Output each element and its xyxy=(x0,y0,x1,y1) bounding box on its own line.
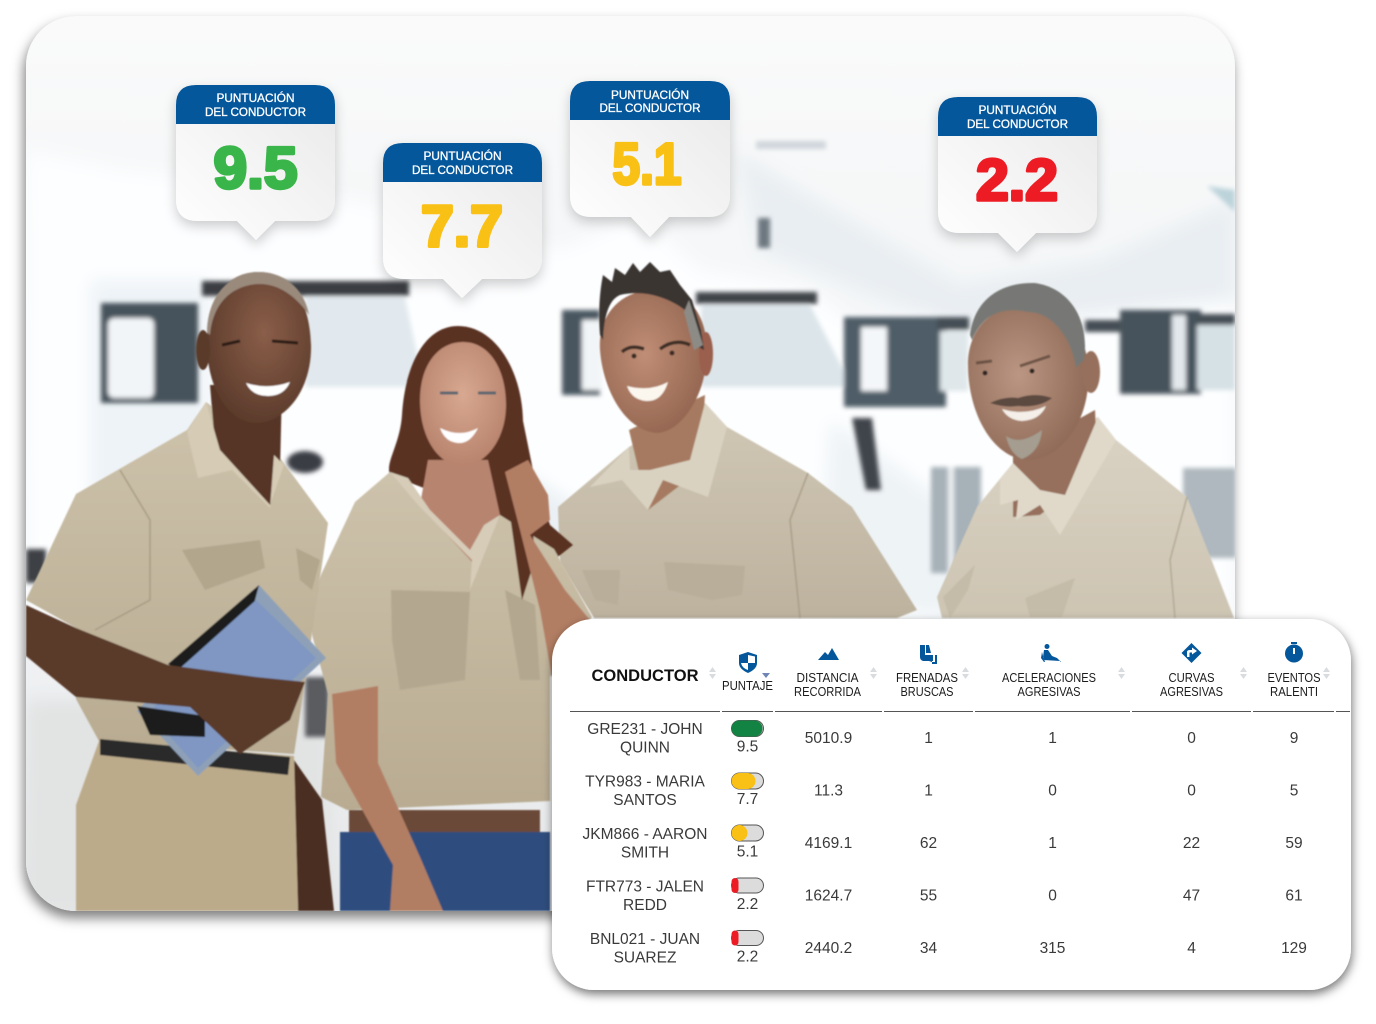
score bar 7.7 xyxy=(732,773,764,789)
row: GRE231: 5010.9 xyxy=(805,730,852,747)
person 2 xyxy=(305,326,592,911)
table header xyxy=(570,642,1350,712)
panel: driver score table xyxy=(552,619,1351,990)
heading: conductor: CONDUCTOR xyxy=(592,666,698,685)
heading: distancia recorrida: RECORRIDA xyxy=(794,684,861,699)
bubble: driver score 9.5: DEL CONDUCTOR xyxy=(205,105,306,119)
heading: curvas agresivas: CURVAS xyxy=(1168,670,1215,685)
photo background: blurred white trucks xyxy=(28,165,1232,842)
row: FTR773: FTR773 - JALEN xyxy=(586,878,704,896)
row: TYR983: SANTOS xyxy=(613,792,677,809)
heading: frenadas bruscas: FRENADAS xyxy=(896,670,958,685)
score bar 2.2 xyxy=(732,930,764,946)
bubble: driver score 5.1: 5.1 xyxy=(612,132,682,197)
row: FTR773: 2.2 xyxy=(737,896,758,913)
row: FTR773: REDD xyxy=(623,897,667,914)
row: BNL021: 2.2 xyxy=(737,948,758,966)
row: FTR773: 61 xyxy=(1285,888,1303,904)
heading: aceleraciones agresivas: AGRESIVAS xyxy=(1018,684,1081,699)
row: BNL021: 315 xyxy=(1040,940,1065,957)
bubble: driver score 5.1 xyxy=(570,81,730,237)
bubble: driver score 7.7: PUNTUACIÓN xyxy=(424,148,502,163)
sort arrows xyxy=(709,667,1330,679)
bubble: driver score 9.5: 9.5 xyxy=(214,136,298,201)
bubble: driver score 5.1: PUNTUACIÓN xyxy=(611,87,689,102)
row: TYR983: TYR983 - MARIA xyxy=(585,774,706,790)
row: JKM866: 1 xyxy=(1048,835,1057,852)
row: GRE231: 0 xyxy=(1187,730,1196,747)
row: JKM866: JKM866 - AARON xyxy=(583,826,707,843)
heading: puntaje: PUNTAJE xyxy=(722,678,773,693)
bubble: driver score 2.2: 2.2 xyxy=(976,148,1058,213)
icon: stopwatch xyxy=(1285,642,1303,662)
row: TYR983: 5 xyxy=(1290,782,1298,800)
bubble: driver score 7.7: DEL CONDUCTOR xyxy=(412,163,513,177)
heading: eventos ralenti: RALENTI xyxy=(1270,684,1318,699)
icon: shield xyxy=(739,652,757,673)
row: BNL021: SUAREZ xyxy=(614,950,676,966)
bubble: driver score 2.2 xyxy=(938,97,1097,252)
heading: aceleraciones agresivas: ACELERACIONES xyxy=(1002,670,1096,685)
photo panel: drivers in front of trucks xyxy=(26,16,1236,911)
row: BNL021: 2440.2 xyxy=(805,940,852,957)
row: TYR983: 11.3 xyxy=(814,782,843,800)
bubble: driver score 2.2: PUNTUACIÓN xyxy=(978,102,1056,117)
score bar 9.5 xyxy=(732,720,764,736)
row: TYR983: 0 xyxy=(1187,782,1196,800)
person 4 xyxy=(937,283,1234,618)
row: JKM866: 62 xyxy=(920,835,937,852)
bubble: driver score 5.1: DEL CONDUCTOR xyxy=(600,101,701,115)
row: GRE231: 1 xyxy=(1048,730,1057,747)
heading: distancia recorrida: DISTANCIA xyxy=(796,670,859,685)
row: GRE231: QUINN xyxy=(620,740,670,756)
icon: curve road sign xyxy=(1182,643,1202,663)
person 1 xyxy=(26,272,334,911)
row: TYR983 xyxy=(585,773,1298,809)
score bar 2.2 xyxy=(732,878,764,893)
bubble: driver score 9.5 xyxy=(176,85,335,240)
row: BNL021: BNL021 - JUAN xyxy=(590,931,700,948)
heading: eventos ralenti: EVENTOS xyxy=(1268,670,1321,685)
row: GRE231: GRE231 - JOHN xyxy=(587,721,703,738)
row: FTR773 xyxy=(586,878,1303,914)
row: BNL021 xyxy=(590,930,1307,966)
row: BNL021: 129 xyxy=(1281,940,1307,957)
row: JKM866: SMITH xyxy=(621,844,669,862)
row: JKM866: 59 xyxy=(1285,835,1303,852)
bubble: driver score 7.7: 7.7 xyxy=(421,194,503,259)
row: FTR773: 55 xyxy=(920,888,937,904)
bubble: driver score 2.2: DEL CONDUCTOR xyxy=(967,117,1068,131)
icon: mountains xyxy=(818,648,839,660)
row: TYR983: 1 xyxy=(924,782,933,800)
bubble: driver score 9.5: PUNTUACIÓN xyxy=(216,90,294,105)
row: JKM866: 22 xyxy=(1183,835,1200,852)
row: GRE231 xyxy=(587,720,1298,756)
row: JKM866 xyxy=(583,825,1303,862)
row: TYR983: 0 xyxy=(1048,782,1057,800)
icon: seat braking xyxy=(920,645,937,664)
row: BNL021: 4 xyxy=(1187,940,1196,957)
row: FTR773: 0 xyxy=(1048,888,1057,904)
person 3 xyxy=(558,262,917,618)
heading: curvas agresivas: AGRESIVAS xyxy=(1160,684,1223,699)
row: JKM866: 5.1 xyxy=(737,844,758,860)
row: TYR983: 7.7 xyxy=(737,791,758,808)
bubble: driver score 7.7 xyxy=(383,143,542,298)
right truck windows xyxy=(844,317,946,407)
row: FTR773: 47 xyxy=(1183,888,1200,904)
center truck xyxy=(562,310,600,395)
icon: seat accelerating xyxy=(1041,644,1061,662)
left truck cab windows xyxy=(101,303,198,403)
heading: frenadas bruscas: BRUSCAS xyxy=(900,684,954,699)
row: FTR773: 1624.7 xyxy=(805,888,852,904)
row: GRE231: 1 xyxy=(924,730,933,747)
row: GRE231: 9.5 xyxy=(737,738,758,756)
row: BNL021: 34 xyxy=(920,940,937,957)
score bar 5.1 xyxy=(732,825,764,841)
row: JKM866: 4169.1 xyxy=(805,835,852,852)
row: GRE231: 9 xyxy=(1290,730,1298,747)
